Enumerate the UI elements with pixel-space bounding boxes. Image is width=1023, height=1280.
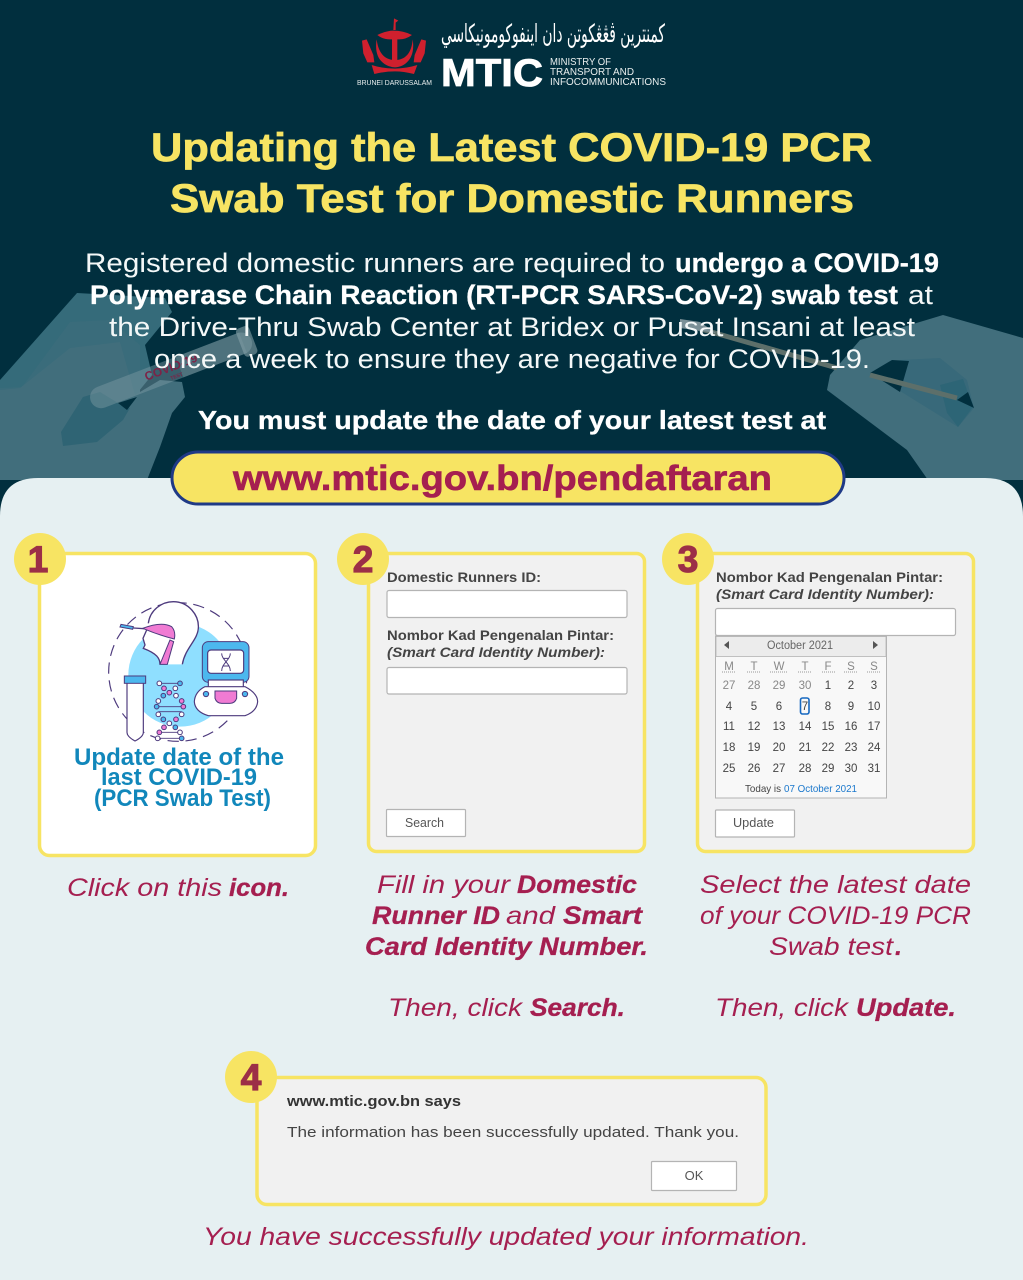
calendar popup: 2 [848, 680, 854, 692]
form fields [387, 569, 627, 694]
step 1 caption: icon. [229, 874, 289, 902]
title: Swab Test for Domestic Runners [170, 177, 854, 221]
icon label [74, 744, 284, 812]
search button: Search [405, 815, 444, 830]
intro paragraph: the Drive-Thru Swab Center at Bridex or Pusat Insani at least [109, 312, 916, 342]
website address pill: www.mtic.gov.bn/pendaftaran [232, 459, 772, 498]
intro paragraph: once a week to ensure they are negative for COVID-19. [154, 344, 870, 374]
intro paragraph: Registered domestic runners are required to [85, 248, 665, 278]
step 2 badge [337, 533, 389, 585]
panel: steps background [0, 478, 1023, 1280]
step 3 caption: Select the latest date [700, 871, 971, 899]
step 2 caption [365, 871, 648, 1022]
step 3 caption [700, 871, 971, 1022]
illustration: right gloved hand holding swab [680, 315, 1023, 480]
step 1 caption [67, 874, 289, 902]
logo: national crest and ministry wordmark [357, 18, 666, 95]
step 1 badge [14, 533, 66, 585]
step 2 caption: Search. [530, 994, 625, 1022]
step 2 caption: Then, click [388, 994, 524, 1022]
icon: test tube: TEST [170, 372, 184, 382]
calendar popup: 8 [825, 701, 831, 713]
calendar popup: 7 [802, 701, 808, 713]
update button [716, 810, 794, 837]
calendar popup: Today is [745, 783, 781, 795]
calendar popup: 4 [726, 701, 733, 713]
step 3 caption: Swab test [769, 933, 894, 961]
title: Updating the Latest COVID-19 PCR [151, 126, 872, 170]
calendar popup: 13 [773, 721, 785, 733]
calendar popup: 29 [822, 763, 834, 775]
step 2 caption: Runner ID [372, 902, 500, 930]
step 3 caption: of your COVID-19 PCR [700, 902, 971, 930]
panel: step 2 form [337, 533, 644, 852]
step 3 badge [662, 533, 714, 585]
calendar popup: S [870, 661, 878, 673]
update instruction: You must update the date of your latest test at [198, 405, 826, 435]
calendar popup: 30 [845, 763, 857, 775]
crest caption: BRUNEI DARUSSALAM [357, 78, 432, 87]
calendar popup: 23 [845, 742, 857, 754]
calendar popup: S [847, 661, 855, 673]
intro paragraph: at [908, 280, 934, 310]
calendar popup: 27 [773, 763, 785, 775]
dialog message: The information has been successfully updated. Thank you. [287, 1124, 739, 1141]
ministry name in English: INFOCOMMUNICATIONS [550, 77, 666, 88]
date field label: (Smart Card Identity Number): [716, 586, 934, 602]
step 3 caption: Then, click [715, 994, 850, 1022]
step 3 caption: . [895, 933, 902, 961]
calendar popup: 18 [723, 742, 735, 754]
calendar popup: 15 [822, 721, 834, 733]
icon: test tube: COVID-19 [143, 351, 200, 384]
icon label: last COVID-19 [101, 764, 257, 791]
icon: test tube [85, 325, 259, 415]
calendar popup: 28 [799, 763, 811, 775]
step 2 caption: Card Identity Number. [365, 933, 648, 961]
calendar popup: 10 [868, 701, 880, 713]
date field label [716, 569, 943, 602]
intro paragraph: Polymerase Chain Reaction (RT-PCR SARS-CoV-2) swab test [90, 280, 898, 310]
form fields: Domestic Runners ID: [387, 569, 541, 585]
step 4 badge [225, 1051, 277, 1103]
calendar popup: 11 [723, 721, 735, 733]
update button: Update [733, 815, 774, 830]
panel: step 1 [14, 533, 316, 856]
final caption: You have successfully updated your information. [203, 1223, 809, 1251]
calendar popup: 16 [845, 721, 857, 733]
calendar popup: 31 [868, 763, 880, 775]
step 1 caption: Click on this [67, 874, 222, 902]
icon label: (PCR Swab Test) [94, 785, 271, 812]
intro paragraph [85, 248, 939, 374]
step 2 caption: Domestic [517, 871, 637, 899]
ministry name in English: MINISTRY OF [550, 57, 611, 68]
step 2 caption: Smart [563, 902, 644, 930]
calendar popup: 9 [848, 701, 854, 713]
step 3 caption: Update. [856, 994, 956, 1022]
date input [716, 608, 956, 636]
panel: step 3 date picker [662, 533, 974, 852]
calendar popup [716, 636, 886, 798]
calendar popup: 3 [871, 680, 877, 692]
calendar popup: 14 [799, 721, 812, 733]
panel: step 4 confirmation dialog [225, 1051, 766, 1204]
title [151, 126, 872, 221]
calendar popup: 1 [825, 680, 831, 692]
icon label: Update date of the [74, 744, 284, 771]
swab stick [680, 323, 837, 368]
calendar popup: 28 [748, 680, 760, 692]
step 3 badge: 3 [678, 539, 698, 580]
calendar popup: 5 [751, 701, 757, 713]
calendar popup: 20 [773, 742, 785, 754]
calendar popup: 19 [748, 742, 760, 754]
calendar popup: 29 [773, 680, 785, 692]
calendar popup: 27 [723, 680, 735, 692]
calendar popup: 24 [868, 742, 881, 754]
ministry name in English [550, 57, 666, 88]
illustration: left gloved hand holding test tube [0, 293, 259, 480]
calendar popup: 30 [799, 680, 811, 692]
step 4 badge: 4 [241, 1057, 262, 1098]
calendar popup: 25 [723, 763, 735, 775]
OK button: OK [685, 1168, 704, 1183]
ministry name in English: TRANSPORT AND [550, 67, 634, 78]
calendar popup: F [824, 661, 832, 673]
calendar popup: October 2021 [767, 640, 833, 652]
form fields: (Smart Card Identity Number): [387, 644, 605, 660]
dialog heading: www.mtic.gov.bn says [286, 1093, 461, 1110]
website address pill [172, 452, 844, 504]
icon: PCR swab test illustration [109, 602, 258, 741]
calendar popup: W [774, 661, 785, 673]
calendar popup: 22 [822, 742, 834, 754]
calendar popup: 26 [748, 763, 760, 775]
MTIC wordmark: MTIC [441, 52, 543, 95]
form fields: Nombor Kad Pengenalan Pintar: [387, 627, 614, 643]
date field label: Nombor Kad Pengenalan Pintar: [716, 569, 943, 585]
calendar popup: 21 [799, 742, 811, 754]
calendar popup: 6 [776, 701, 782, 713]
step 2 caption: and [506, 902, 556, 930]
calendar popup: 07 October 2021 [784, 783, 857, 795]
search button [386, 810, 466, 836]
step 2 badge: 2 [353, 539, 373, 580]
calendar popup: 12 [748, 721, 760, 733]
calendar popup: T [750, 661, 758, 673]
intro paragraph: undergo a COVID-19 [675, 248, 939, 278]
OK button [652, 1162, 736, 1190]
step 2 caption: Fill in your [377, 871, 512, 899]
Jawi ministry name: کمنترين ڤڠڠکوتن دان اينفوکومونيکاسي [441, 19, 665, 48]
step 1 badge: 1 [28, 539, 48, 580]
calendar popup: T [801, 661, 809, 673]
icon: Brunei crest [362, 18, 426, 74]
calendar popup: 17 [868, 721, 880, 733]
calendar popup: M [724, 661, 734, 673]
